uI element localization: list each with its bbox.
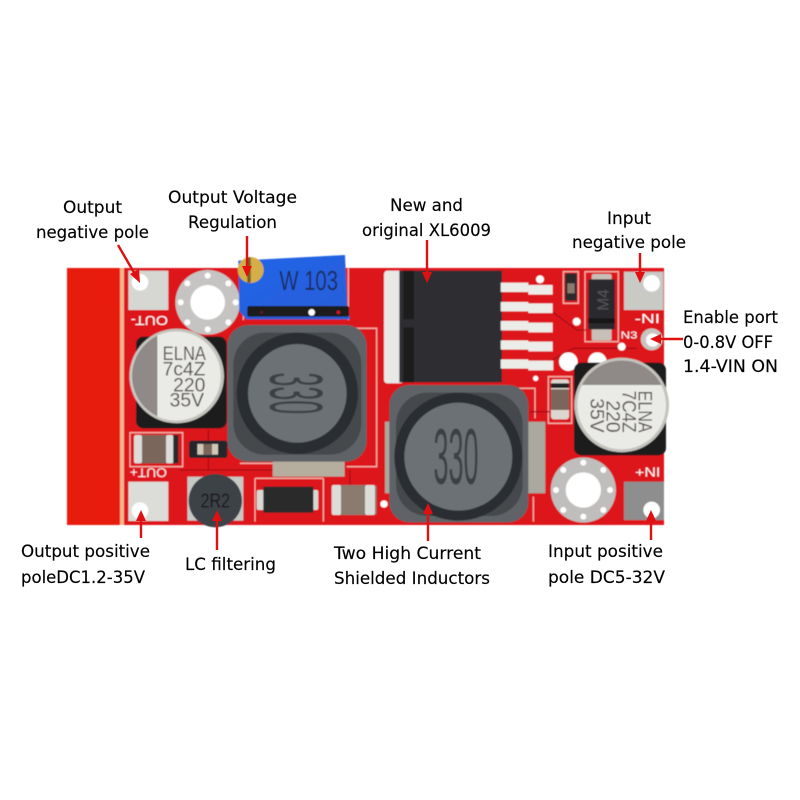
resistor chip: [565, 273, 577, 301]
XL6009 chip tab: [384, 271, 403, 383]
pcb outlines left: [130, 268, 377, 522]
arrow: LC filtering: [212, 510, 222, 550]
output capacitor: 7c4Z: [163, 359, 206, 380]
output capacitor: 35V: [170, 391, 204, 412]
silkscreen IN-: -NI: [635, 311, 660, 326]
output capacitor: ELNA: [163, 344, 206, 365]
pcb traces left: [180, 430, 350, 490]
enable port hole: [641, 328, 663, 350]
label: output negative pole: Output: [63, 198, 122, 218]
arrow: inductors: [423, 503, 433, 541]
blue trimmer potentiometer: [238, 255, 350, 319]
small SMD capacitor: [551, 379, 569, 419]
mounting ring right: [551, 457, 616, 523]
arrow: output positive: [136, 510, 146, 538]
schottky diode M4: [588, 274, 615, 341]
silkscreen N3: N3: [621, 331, 638, 342]
inductor side tabs: [385, 422, 545, 493]
input positive pad: [624, 482, 664, 520]
label line: regulation: Regulation: [188, 213, 277, 233]
inductor left: [227, 325, 367, 462]
inductor right: [389, 385, 528, 522]
silkscreen OUT-: OUT-: [131, 313, 168, 328]
blue trimmer potentiometer: W 103: [279, 265, 338, 296]
chip pins: [501, 283, 553, 370]
arrow: output negative pole: [118, 245, 140, 283]
label line: output voltage range: poleDC1.2-35V: [21, 568, 145, 588]
silkscreen OUT+: OUT+: [129, 465, 167, 480]
label: enable port: Enable port: [683, 308, 778, 328]
output negative pad: [128, 271, 168, 310]
LC filter inductor 2R2: 2R2: [201, 489, 230, 512]
label line: input voltage range: pole DC5-32V: [548, 568, 665, 588]
label: output voltage regulation: Output Voltage: [168, 188, 297, 208]
output positive pad: [128, 482, 168, 521]
label: output positive: Output positive: [21, 542, 150, 562]
label line: negative pole: negative pole: [36, 223, 149, 243]
left copper strip: [67, 268, 120, 525]
circuit board photo: [67, 255, 669, 527]
mounting ring left: [175, 270, 240, 335]
left half of board components: [128, 255, 377, 527]
schottky diode M4: M4: [595, 289, 612, 311]
output capacitor: [129, 329, 227, 428]
input capacitor: 35V: [586, 398, 607, 433]
inductor left: 330: [254, 372, 338, 414]
label line: on range: 1.4-VIN ON: [683, 357, 778, 377]
right half of board components: [380, 271, 669, 523]
label line: shielded inductors: Shielded Inductors: [334, 569, 490, 589]
label: two high current: Two High Current: [333, 544, 481, 564]
inductor mounting tab: [273, 460, 345, 477]
board substrate: [67, 268, 664, 525]
gold edge line: [120, 268, 124, 525]
input negative pad: [624, 272, 663, 310]
small filter inductor chip: [189, 441, 227, 458]
label line: negative pole input: negative pole: [572, 233, 686, 253]
silkscreen IN+: +NI: [635, 465, 660, 480]
arrow: input positive: [646, 510, 656, 540]
output capacitor: 220: [173, 375, 205, 396]
label: input: Input: [607, 209, 651, 229]
pcb outlines right: [518, 272, 618, 522]
arrow: enable port: [650, 334, 683, 344]
label: new and: New and: [390, 196, 463, 216]
output capacitor 2: [332, 485, 377, 515]
pcb traces right: [502, 310, 637, 412]
XL6009 converter chip: [399, 271, 502, 382]
arrow: output voltage regulation: [242, 236, 252, 277]
label line: original XL6009: original XL6009: [362, 221, 491, 241]
output diode: [257, 487, 318, 513]
input capacitor: 220: [602, 400, 623, 433]
input capacitor: 7C4Z: [618, 391, 639, 433]
LC filter inductor 2R2: [187, 474, 243, 527]
label: LC filtering: LC filtering: [185, 555, 276, 575]
vias: [380, 275, 626, 508]
inductor right: 330: [433, 412, 478, 500]
label line: off range: 0-0.8V OFF: [683, 333, 773, 353]
arrow: input negative pole: [635, 253, 645, 283]
input capacitor: ELNA: [633, 391, 654, 433]
arrow: XL6009: [422, 240, 432, 283]
output capacitor SMD: [134, 435, 178, 463]
input capacitor: [574, 358, 669, 455]
label: input positive: Input positive: [548, 542, 663, 562]
